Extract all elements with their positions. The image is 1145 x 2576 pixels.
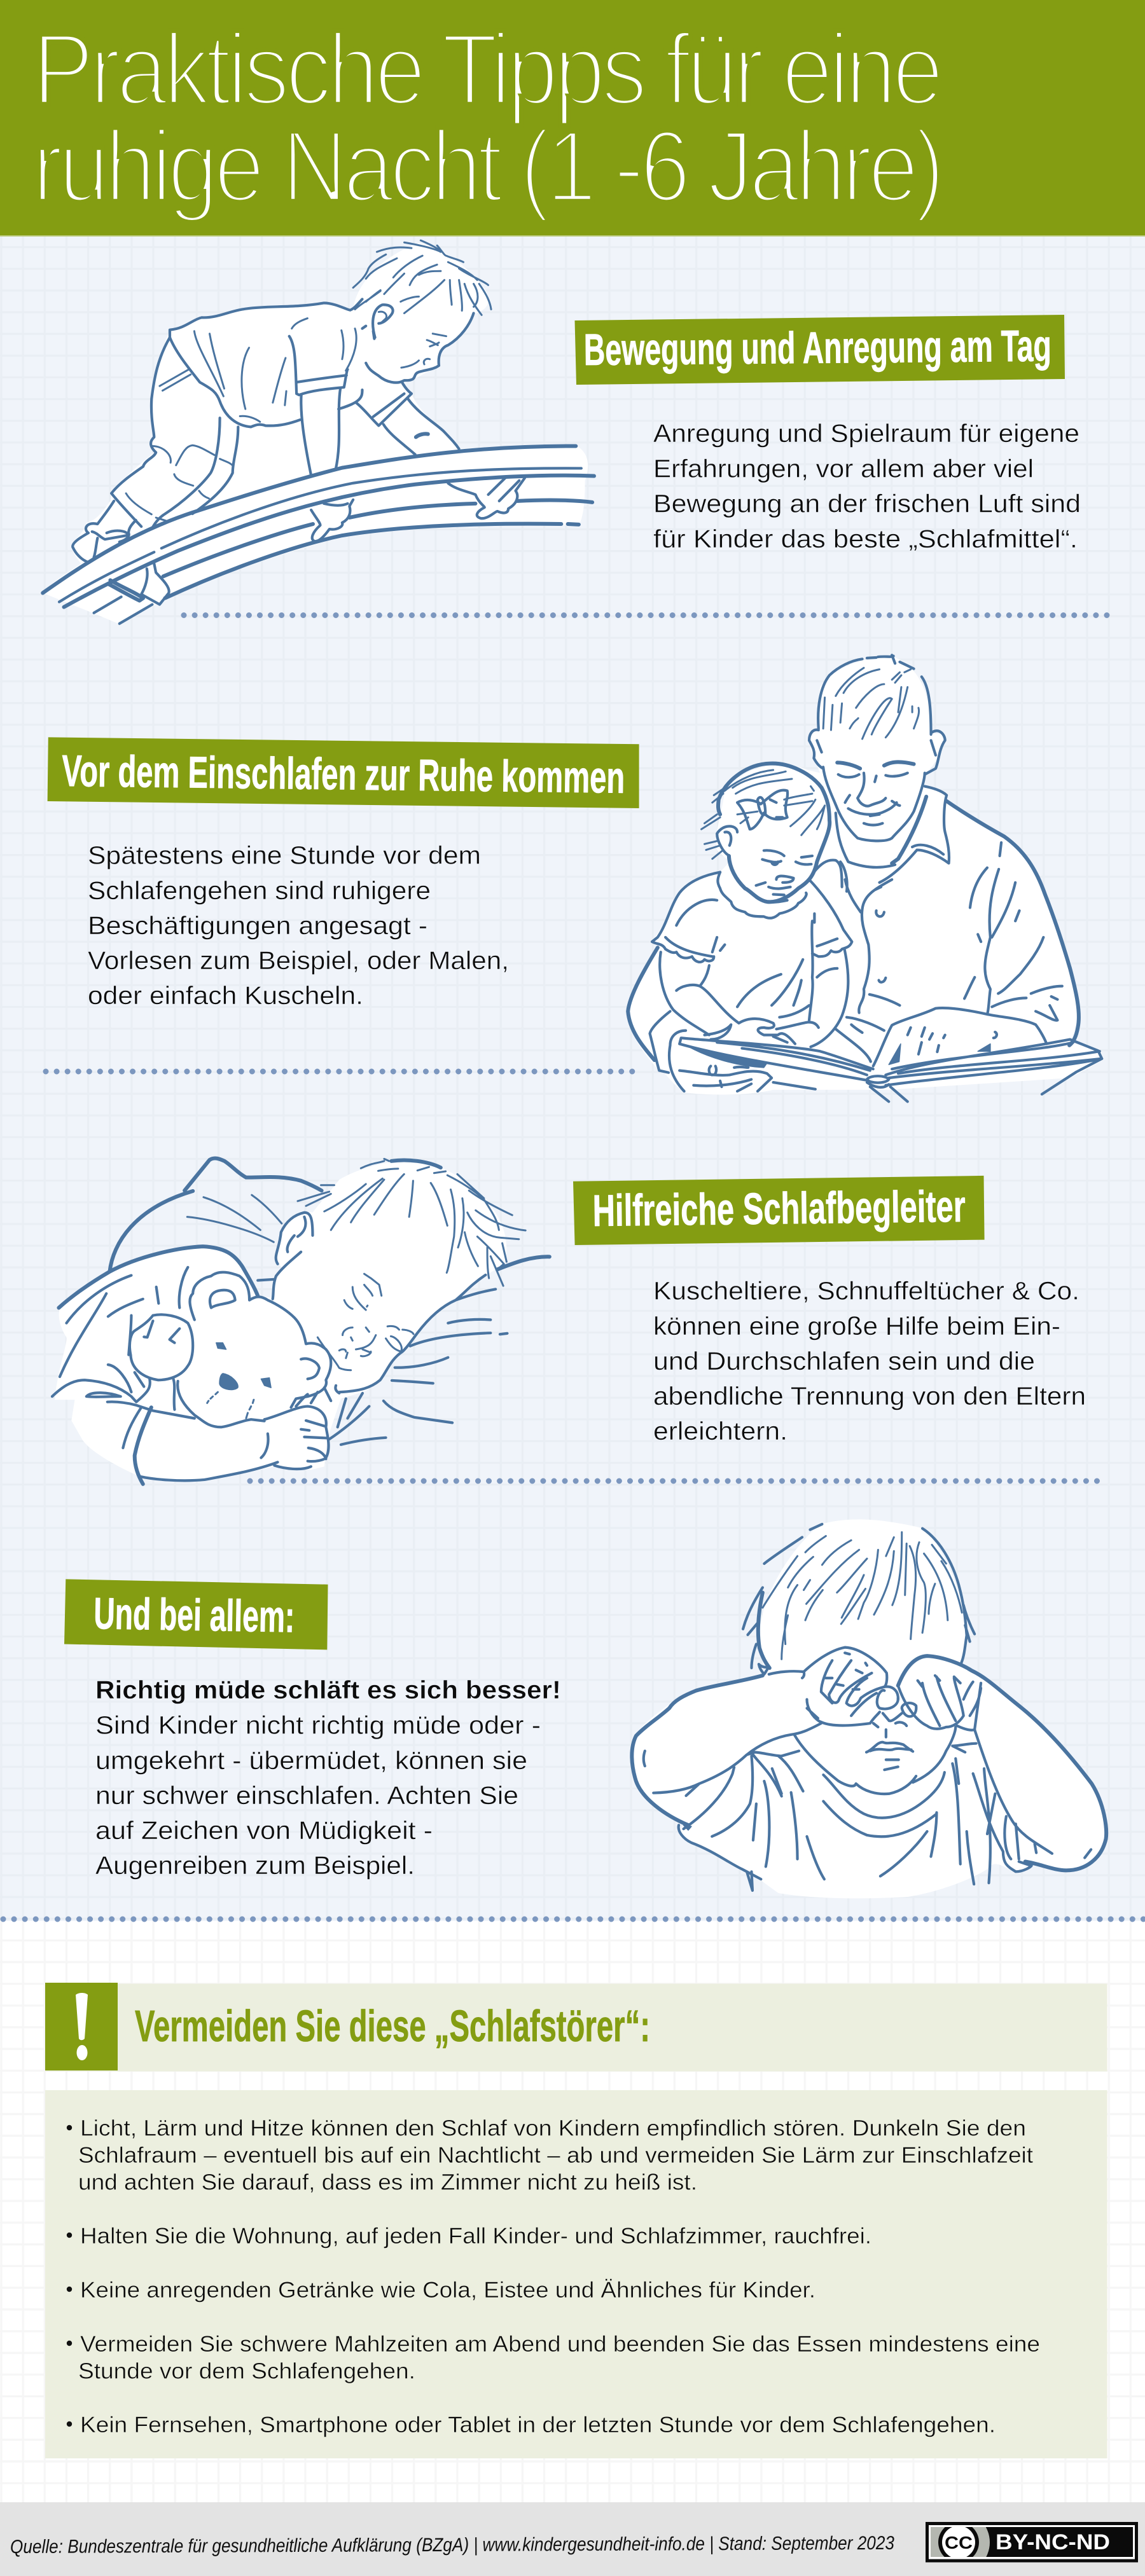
bullet: Licht, Lärm, Hitze: und achten Sie darauf, dass es im Zimmer nicht zu heiß ist. [78,2170,697,2195]
text: Und bei allem: nur schwer einschlafen. Achten Sie [95,1782,518,1810]
text: Schlafbegleiter: erleichtern. [653,1417,788,1445]
bullet: Mahlzeiten: Stunde vor dem Schlafengehen. [78,2359,415,2383]
bullet: Licht, Lärm, Hitze [67,2116,1033,2195]
heading: Und bei allem: Und bei allem: [94,1588,295,1642]
bullet: rauchfrei: Halten Sie die Wohnung, auf jeden Fall Kinder- und Schlafzimmer, rauchfrei. [80,2224,871,2249]
title: ruhige Nacht (1 -6 Jahre) [32,109,941,223]
text: Bewegung: Bewegung an der frischen Luft sind [653,490,1081,518]
bullet: Getränke: Keine anregenden Getränke wie Cola, Eistee und Ähnliches für Kinder. [80,2278,815,2303]
bullet: Fernsehen: Kein Fernsehen, Smartphone oder Tablet in der letzten Stunde vor dem Schlafengehen. [80,2413,996,2437]
heading: Vor dem Einschlafen zur Ruhe kommen [48,737,639,808]
text: Vor dem Einschlafen: Spätestens eine Stunde vor dem [88,842,481,870]
title [32,12,941,223]
heading: Vermeiden Sie diese Schlafstörer: Vermeiden Sie diese „Schlafstörer“: [135,2001,650,2051]
text: Schlafbegleiter [653,1277,1086,1445]
text: Und bei allem: Augenreiben zum Beispiel. [95,1852,415,1880]
text: Und bei allem: auf Zeichen von Müdigkeit - [95,1817,433,1845]
text: Und bei allem [95,1676,561,1880]
text: Bewegung [653,420,1081,553]
icon: exclamation mark [45,1983,118,2070]
text: Und bei allem: Richtig müde schläft es sich besser! [95,1676,561,1704]
illustration: father reading to child [628,655,1103,1101]
header band [0,0,1145,237]
title: Praktische Tipps für eine [32,12,940,126]
text: Vor dem Einschlafen: Schlafengehen sind ruhigere [88,877,431,905]
bullet: Licht, Lärm, Hitze: Licht, Lärm und Hitze können den Schlaf von Kindern empfindlich stören. Dunkeln Sie den [80,2116,1026,2140]
text: Schlafbegleiter: Kuscheltiere, Schnuffeltücher & Co. [653,1277,1079,1305]
text: Vor dem Einschlafen: oder einfach Kuscheln. [88,982,363,1010]
text: Schlafbegleiter: können eine große Hilfe beim Ein- [653,1312,1060,1340]
text: Bewegung: für Kinder das beste „Schlafmittel“. [653,525,1078,553]
bullet: Mahlzeiten [67,2332,1040,2383]
bullet: Licht, Lärm, Hitze: Schlafraum – eventuell bis auf ein Nachtlicht – ab und vermeiden Sie Lärm zur Einschlafzeit [78,2143,1033,2168]
text: Und bei allem: umgekehrt - übermüdet, können sie [95,1747,527,1775]
bullet: Mahlzeiten: Vermeiden Sie schwere Mahlzeiten am Abend und beenden Sie das Essen mindestens eine [80,2332,1040,2357]
icon: CC BY-NC-ND badge [926,2522,1138,2563]
text: Bewegung: Erfahrungen, vor allem aber viel [653,455,1034,483]
heading: Bewegung und Anregung am Tag [575,315,1065,385]
panel: Schlafstörer list [45,2090,1107,2458]
footer [0,2502,1145,2576]
heading: Hilfreiche Schlafbegleiter: Hilfreiche Schlafbegleiter [592,1181,966,1236]
icon: CC BY-NC-ND badge: BY-NC-ND [996,2530,1110,2554]
illustration: sleeping child with teddy bear [52,1158,550,1484]
illustration: boy climbing on a bar [43,240,594,624]
text: Schlafbegleiter: und Durchschlafen sein und die [653,1347,1035,1375]
text: Bewegung: Anregung und Spielraum für eigene [653,420,1079,448]
text: Vor dem Einschlafen: Vorlesen zum Beispiel, oder Malen, [88,947,509,975]
heading: Und bei allem [64,1579,328,1650]
illustration: tired child rubbing eyes [632,1519,1106,1898]
text: Vor dem Einschlafen [88,842,509,1010]
source line: Quelle: Bundeszentrale für gesundheitliche Aufklärung (BZgA) | www.kindergesundheit-info.de | Stand: September 2023 [10,2533,894,2558]
text: Schlafbegleiter: abendliche Trennung von den Eltern [653,1382,1086,1410]
text: Und bei allem: Sind Kinder nicht richtig müde oder - [95,1712,541,1740]
text: Vor dem Einschlafen: Beschäftigungen angesagt - [88,912,427,940]
panel: Schlafstörer heading [45,1983,1107,2072]
heading: Vor dem Einschlafen zur Ruhe kommen: Vor dem Einschlafen zur Ruhe kommen [62,746,625,802]
heading: Hilfreiche Schlafbegleiter [573,1176,985,1245]
icon: CC BY-NC-ND badge: CC [945,2533,973,2552]
